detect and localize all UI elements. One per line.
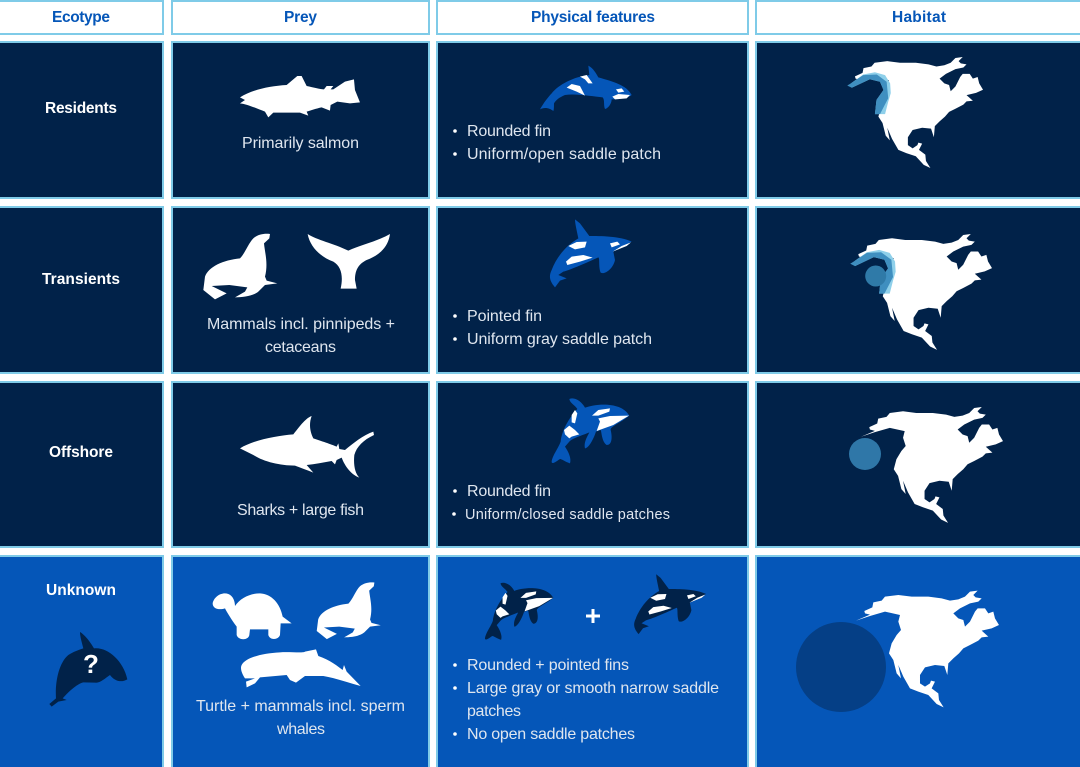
map: North America with coastal range [847,57,983,168]
header: Ecotype: Ecotype [52,9,110,26]
feature list: Uniform gray saddle patch [467,331,652,348]
prey label [207,316,395,356]
header: Prey [172,1,429,34]
panel: Unknown prey [172,556,429,767]
icon: orca closed saddle dark [485,583,553,640]
feature list [453,308,652,348]
panel: Offshore habitat [756,382,1080,547]
prey label: Turtle + mammals incl. sperm [196,698,405,715]
header: Ecotype [0,1,163,34]
panel: Transients prey [172,207,429,373]
prey label: Primarily salmon [242,135,359,152]
feature list: Uniform/closed saddle patches [465,507,670,523]
icon: seal [317,582,381,639]
panel: Transients habitat [756,207,1080,373]
feature list: Pointed fin [467,308,542,325]
panel: Residents habitat [756,42,1080,198]
feature list: Rounded + pointed fins [467,657,629,674]
icon: turtle [213,593,292,639]
header: Habitat [756,1,1080,34]
icon: sperm whale [241,649,361,687]
panel: Unknown habitat [756,556,1080,767]
icon: salmon [240,76,360,117]
feature list: No open saddle patches [467,726,635,743]
map: North America with range and offshore circle [850,234,992,350]
header: Physical features: Physical features [531,9,655,26]
icon: orca pointed fin [550,219,632,287]
feature list: Rounded fin [467,483,551,500]
panel: Offshore physical features [437,382,748,547]
row: Transients [0,207,1080,373]
row: Residents [0,42,1080,198]
panel: Offshore ecotype [0,382,163,547]
feature list: patches [467,703,521,720]
header: Physical features [437,1,748,34]
feature list [452,483,670,523]
panel: Unknown ecotype [0,556,163,767]
icon: orca with question mark: ? [83,649,99,679]
map: North America with large offshore circle [796,591,999,712]
row: Unknown [0,556,1080,767]
feature list: Large gray or smooth narrow saddle [467,680,719,697]
panel: Transients ecotype [0,207,163,373]
panel: Transients ecotype: Transients [42,271,120,288]
prey label: Sharks + large fish [237,502,364,519]
prey label: cetaceans [265,339,336,356]
row: Offshore [0,382,1080,547]
icon: shark [240,416,374,478]
header: Prey: Prey [284,9,317,26]
panel: Residents prey [172,42,429,198]
icon: plus [586,609,600,623]
icon: seal [203,234,277,299]
feature list: Uniform/open saddle patch [467,146,661,163]
icon: orca rounded fin [540,66,632,111]
panel: Transients physical features [437,207,748,373]
map: North America with offshore circle [849,407,1003,523]
panel: Residents ecotype [0,42,163,198]
header row [0,1,1080,34]
header: Habitat: Habitat [892,9,946,26]
panel: Offshore prey [172,382,429,547]
icon: orca pointed fin dark [634,574,706,634]
panel: Unknown ecotype: Unknown [46,582,116,599]
icon: orca with question mark [49,632,127,707]
icon: orca closed saddle [552,398,629,463]
prey label [196,698,405,738]
panel: Residents ecotype: Residents [45,100,117,117]
feature list [453,123,661,163]
feature list: Rounded fin [467,123,551,140]
prey label: Mammals incl. pinnipeds + [207,316,395,333]
panel: Unknown physical features [437,556,748,767]
icon: whale tail [308,234,390,289]
prey label: whales [276,721,325,738]
feature list [453,657,719,743]
panel: Offshore ecotype: Offshore [49,444,113,461]
panel: Residents physical features [437,42,748,198]
